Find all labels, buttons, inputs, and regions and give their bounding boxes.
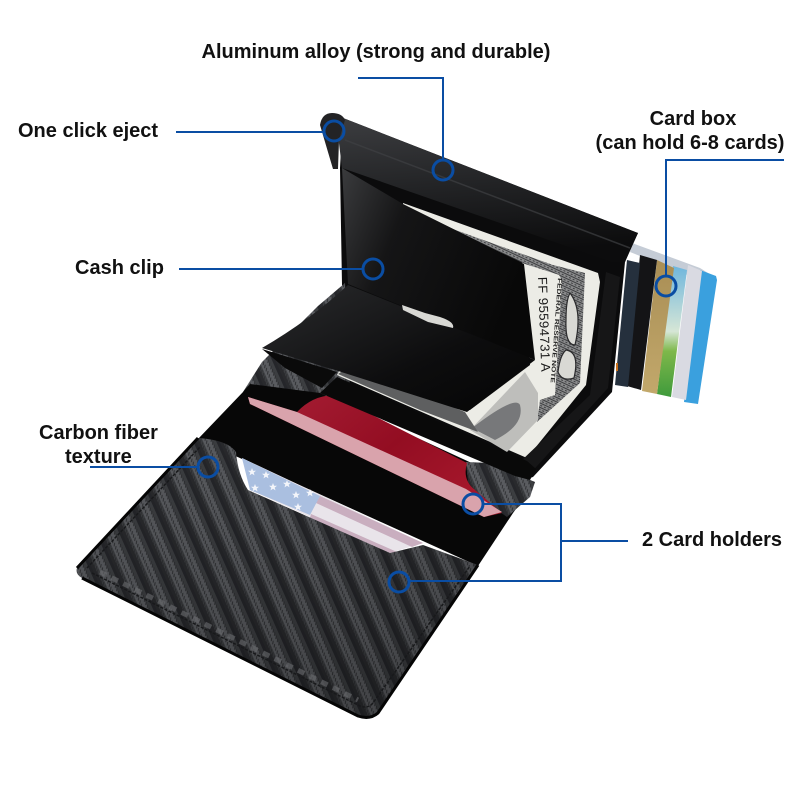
red card in upper pocket bbox=[248, 395, 502, 517]
navy card bbox=[615, 260, 640, 387]
landscape card bbox=[657, 266, 687, 397]
upper carbon fiber panel bbox=[243, 283, 350, 396]
bill lower engraving bbox=[338, 366, 478, 432]
leader line bbox=[176, 131, 324, 133]
bar highlight bbox=[345, 140, 630, 248]
portrait oval bbox=[470, 372, 538, 452]
marker bbox=[433, 160, 453, 180]
label: Carbon fiber bbox=[39, 422, 158, 444]
bracket leader bbox=[410, 504, 628, 581]
label: 2 Card holders bbox=[642, 529, 782, 551]
clip underside tip bbox=[262, 349, 337, 388]
back plate of aluminum case bbox=[340, 118, 638, 478]
marker bbox=[324, 121, 344, 141]
leader line bbox=[358, 78, 443, 160]
serial number: FF 95594731 A bbox=[535, 277, 553, 372]
denomination ovals bbox=[558, 293, 578, 379]
card accent dot bbox=[616, 363, 618, 371]
black leather interior bbox=[198, 384, 530, 566]
white card bbox=[672, 265, 702, 400]
label: Card box bbox=[650, 108, 736, 130]
leader line bbox=[179, 268, 363, 270]
marker bbox=[363, 259, 383, 279]
cash clip bbox=[262, 168, 535, 412]
note label: FEDERAL RESERVE NOTE bbox=[549, 278, 562, 383]
leader line bbox=[666, 160, 784, 276]
label second line: (can hold 6-8 cards) bbox=[596, 132, 784, 154]
stitching edge bbox=[87, 447, 470, 707]
heading: Aluminum alloy (strong and durable) bbox=[202, 41, 550, 63]
blue card bbox=[684, 270, 717, 404]
flag card in front pocket bbox=[242, 458, 423, 553]
lower leaf bbox=[262, 285, 535, 412]
gold card bbox=[642, 260, 674, 394]
right carbon patch bbox=[466, 462, 535, 517]
engraved border bbox=[537, 265, 585, 422]
callout: card box bbox=[596, 108, 784, 296]
wallet photo illustration bbox=[77, 113, 717, 717]
label second line: texture bbox=[65, 446, 132, 468]
callout: carbon fiber texture bbox=[39, 422, 218, 477]
aluminum top bar bbox=[338, 118, 638, 262]
marker bbox=[656, 276, 676, 296]
label: One click eject bbox=[18, 120, 158, 142]
marker upper bbox=[463, 494, 483, 514]
black card bbox=[627, 255, 657, 390]
callout: 2 card holders bbox=[389, 494, 782, 592]
eject lever bbox=[320, 113, 345, 169]
callout: one click eject bbox=[18, 120, 344, 142]
card edges top bbox=[630, 243, 716, 280]
bill paper bbox=[337, 203, 600, 458]
upper leaf bbox=[342, 168, 535, 360]
card box: stacked cards bbox=[615, 243, 717, 404]
money bills bbox=[337, 203, 600, 458]
bottom weave row bbox=[100, 572, 358, 700]
callout: aluminum alloy bbox=[202, 41, 550, 180]
clip slot bbox=[402, 305, 453, 328]
label: Cash clip bbox=[75, 257, 164, 279]
front carbon pocket bbox=[77, 438, 478, 717]
marker bbox=[198, 457, 218, 477]
marker lower bbox=[389, 572, 409, 592]
top engraved band bbox=[450, 228, 585, 280]
callout: cash clip bbox=[75, 257, 383, 279]
frame rim right bbox=[520, 272, 620, 477]
leather flap band bbox=[320, 377, 536, 480]
leader line bbox=[90, 466, 198, 468]
